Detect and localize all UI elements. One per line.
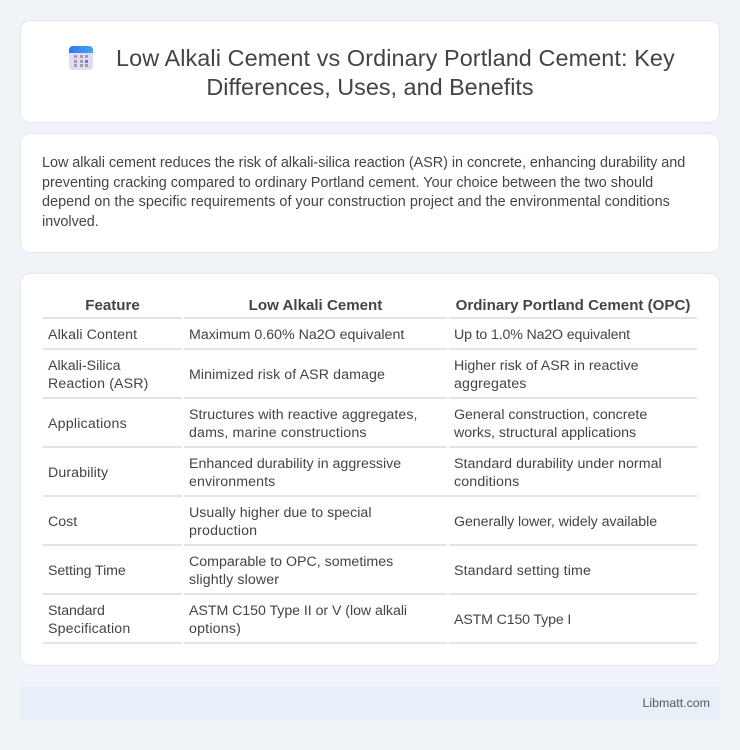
row: Setting Time (48, 554, 591, 588)
intro card (20, 133, 720, 253)
intro text: preventing cracking compared to ordinary Portland cement. Your choice between the two should (42, 174, 653, 190)
row: Applications: General construction, concrete (454, 407, 647, 423)
row: Alkali Content: Up to 1.0% Na2O equivalent (454, 327, 630, 343)
table card (20, 273, 720, 666)
row: Durability: Standard durability under normal (454, 456, 662, 472)
row: Standard Specification: options) (189, 621, 241, 637)
row: Durability (48, 456, 662, 490)
row: Durability: environments (189, 474, 275, 490)
row: Standard Specification: ASTM C150 Type I (454, 612, 571, 628)
header: Low Alkali Cement: Low Alkali Cement (249, 297, 382, 314)
row: Alkali-Silica Reaction: Alkali-Silica (48, 358, 121, 374)
title (116, 45, 675, 100)
intro text: Low alkali cement reduces the risk of alkali-silica reaction (ASR) in concrete, enhancing durability and (42, 155, 685, 171)
table (43, 297, 697, 644)
row: Cost: Generally lower, widely available (454, 514, 657, 530)
header: Feature: Feature (85, 297, 140, 314)
row: Applications (48, 407, 647, 441)
row: Alkali-Silica Reaction: aggregates (454, 376, 526, 392)
row: Alkali-Silica Reaction: Reaction (ASR) (48, 376, 149, 392)
row: Alkali-Silica Reaction: Minimized risk of ASR damage (189, 367, 385, 383)
intro text: involved. (42, 214, 99, 230)
header: Ordinary Portland Cement: Ordinary Portland Cement (OPC) (456, 297, 690, 314)
row: Standard Specification: Specification (48, 621, 130, 637)
intro text (42, 155, 685, 230)
row: Setting Time: slightly slower (189, 572, 279, 588)
row: Standard Specification: ASTM C150 Type II or V (low alkali (189, 603, 407, 619)
row: Applications: works, structural applications (454, 425, 636, 441)
title: Low Alkali Cement vs Ordinary Portland Cement: Key (116, 45, 675, 71)
title: Differences, Uses, and Benefits (206, 74, 534, 100)
intro text: depend on the specific requirements of your construction project and the environmental conditions (42, 194, 670, 210)
title card (20, 20, 720, 123)
footer bar (20, 686, 720, 720)
row: Applications: Applications (48, 416, 127, 432)
row: Alkali-Silica Reaction (48, 358, 639, 392)
row: Standard Specification (48, 603, 571, 637)
row: Cost (48, 505, 657, 539)
row: Alkali-Silica Reaction: Higher risk of ASR in reactive (454, 358, 639, 374)
footer credit: Libmatt.com (643, 696, 710, 710)
icon: calendar (69, 46, 93, 70)
row: Durability: conditions (454, 474, 519, 490)
row: Cost: production (189, 523, 257, 539)
row: Alkali Content (48, 327, 630, 343)
row: Applications: Structures with reactive aggregates, (189, 407, 417, 423)
row: Standard Specification: Standard (48, 603, 105, 619)
row: Cost: Usually higher due to special (189, 505, 372, 521)
row: Setting Time: Setting Time (48, 563, 126, 579)
row: Applications: dams, marine constructions (189, 425, 367, 441)
row: Cost: Cost (48, 514, 77, 530)
row: Durability: Durability (48, 465, 108, 481)
row: Setting Time: Comparable to OPC, sometimes (189, 554, 393, 570)
row: Alkali Content: Maximum 0.60% Na2O equivalent (189, 327, 404, 343)
row: Setting Time: Standard setting time (454, 563, 591, 579)
row: Alkali Content: Alkali Content (48, 327, 137, 343)
row: Durability: Enhanced durability in aggressive (189, 456, 401, 472)
